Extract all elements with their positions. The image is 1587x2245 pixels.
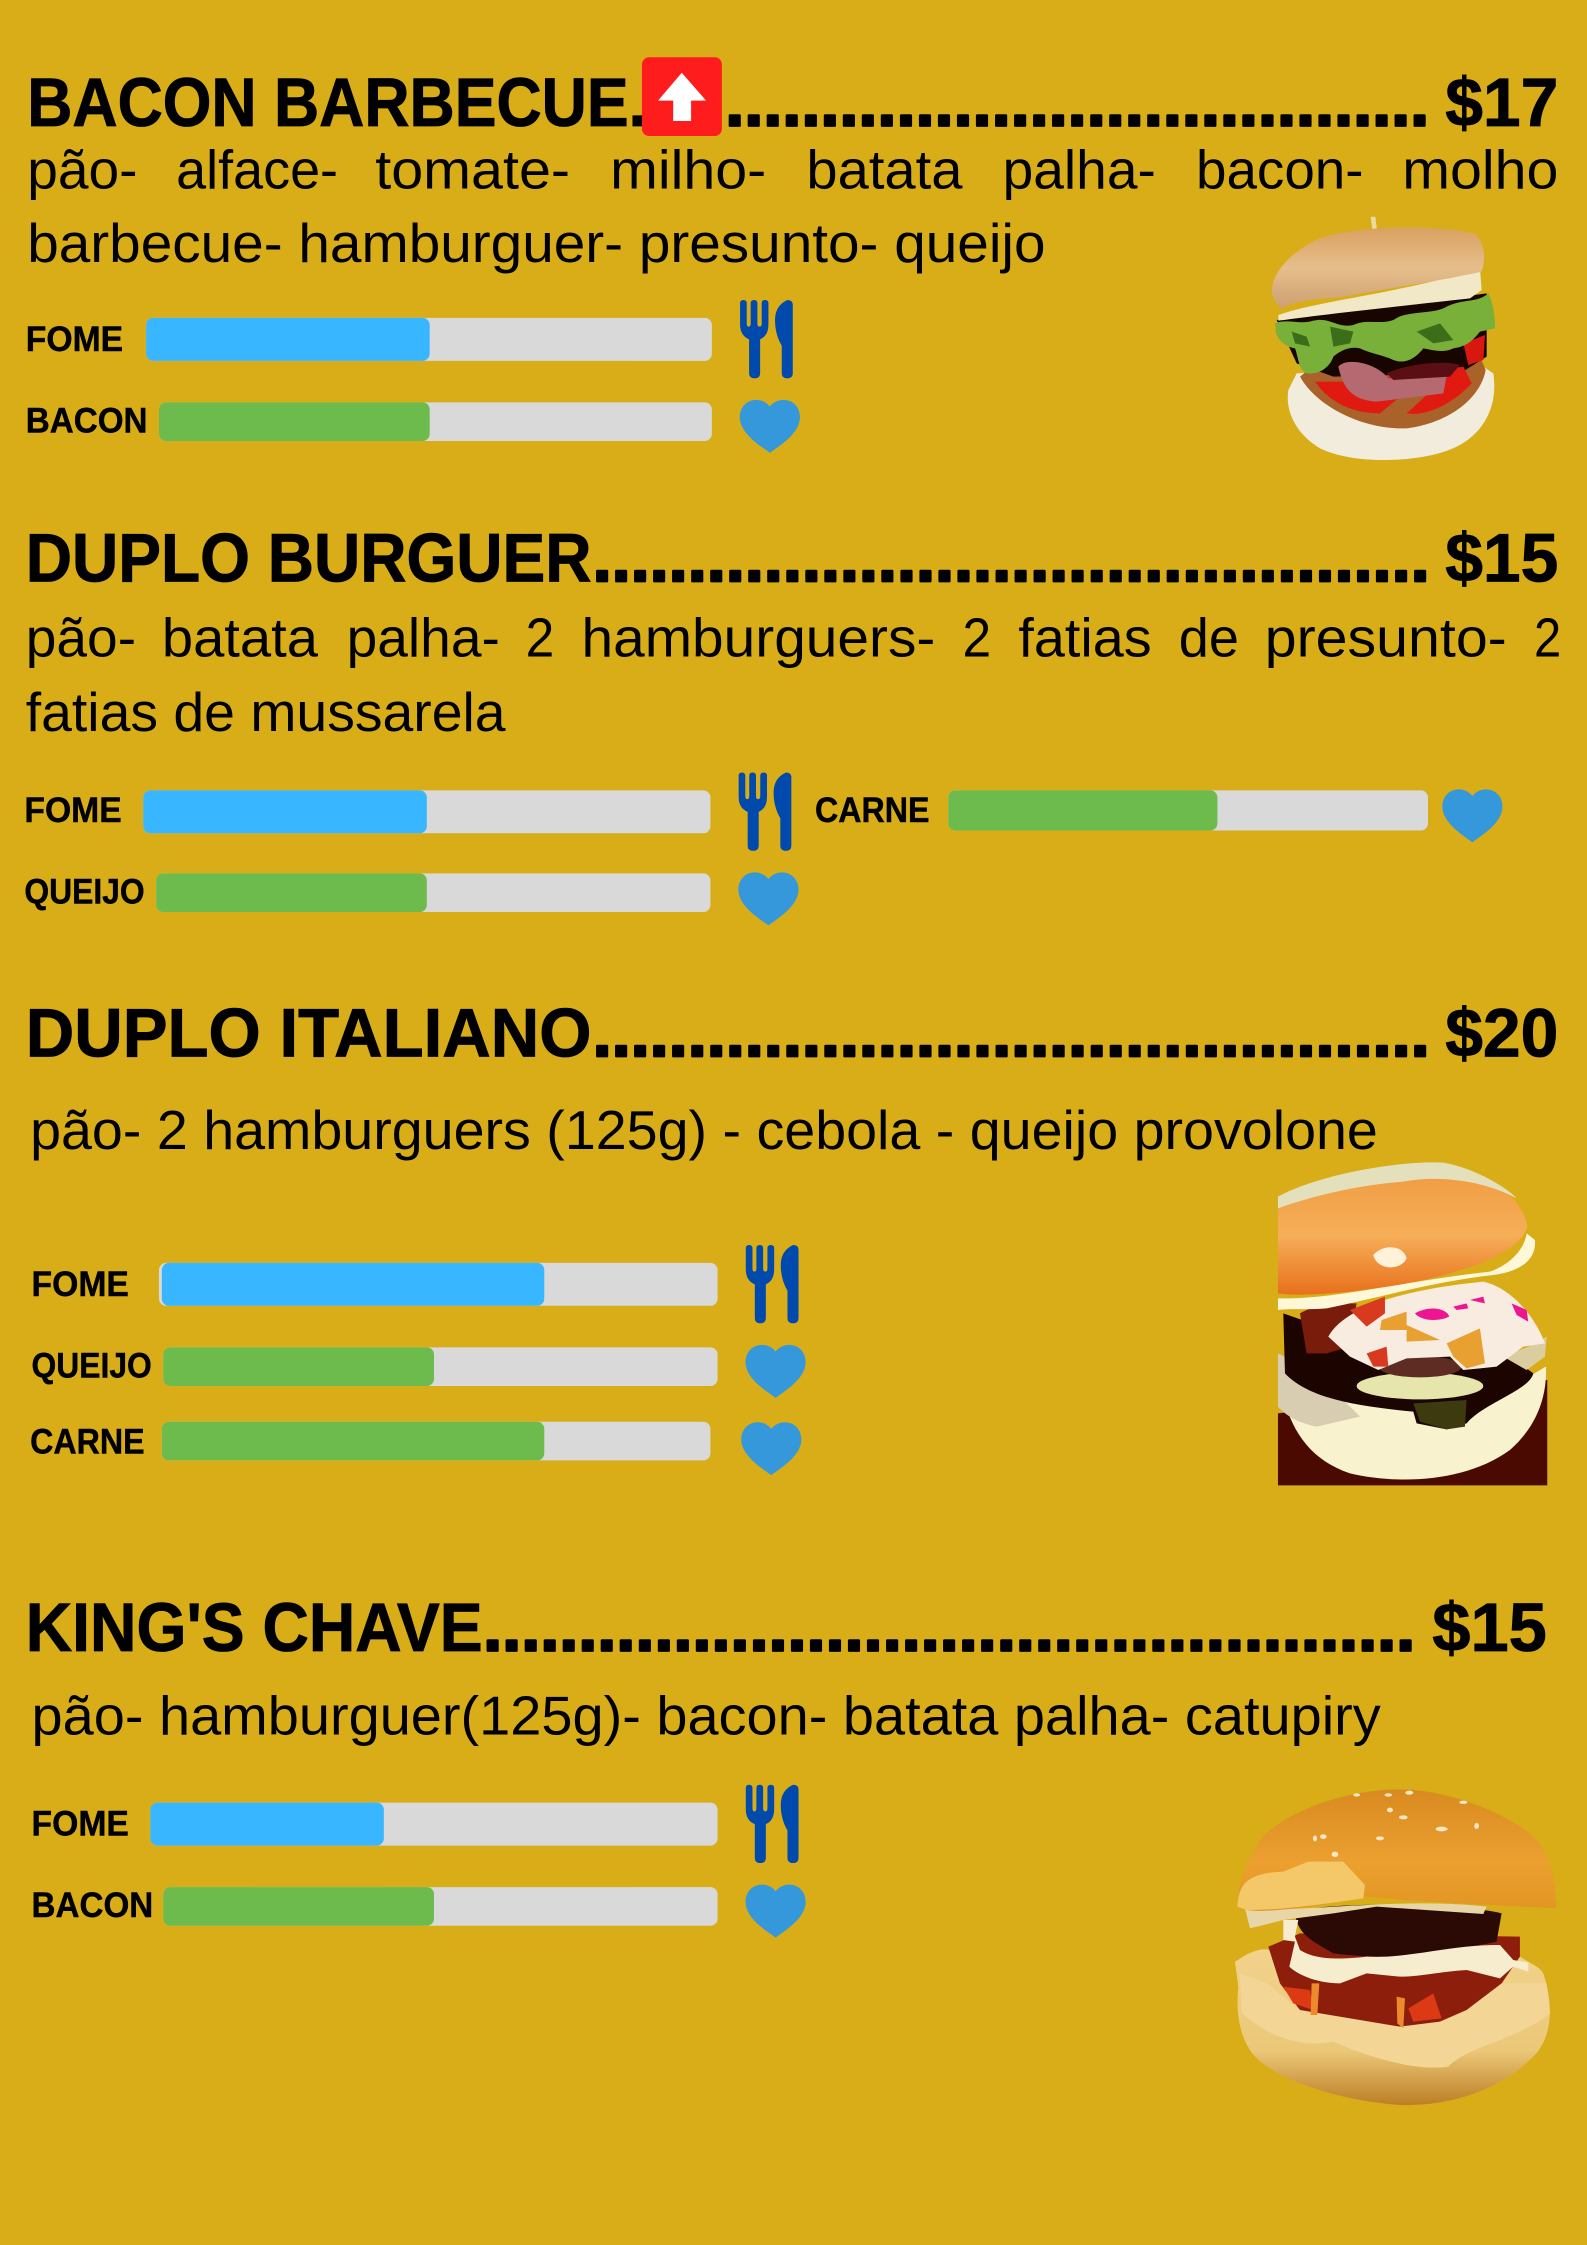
image: sesame burger: [1235, 1789, 1556, 2105]
panel: King's Chave: [26, 1589, 1556, 2105]
ingredients text: pão-: [26, 607, 136, 668]
ingredients text: [26, 607, 1561, 743]
ingredients text: palha-: [347, 607, 500, 668]
image: bacon burger: [1272, 217, 1495, 460]
icon: red up-arrow button: [642, 57, 722, 136]
ingredients text: milho-: [610, 139, 766, 200]
icon: fork and knife: [739, 772, 791, 851]
bar: Carne: CARNE: [815, 791, 930, 830]
ingredients text: pão- 2 hamburguers (125g) - cebola - queijo provolone: [30, 1100, 1378, 1161]
bar: Fome: FOME: [24, 791, 122, 830]
icon: fork and knife: [746, 1785, 799, 1863]
bar: Carne: [815, 790, 1428, 830]
bar: Bacon: [32, 1886, 718, 1926]
ingredients text: batata: [162, 607, 319, 668]
bar: Fome: [26, 318, 712, 361]
ingredients text: 2: [963, 607, 991, 668]
ingredients text: hamburguers-: [582, 607, 935, 668]
leader dots: ............................................: [593, 996, 1429, 1070]
heading: Duplo Italiano: DUPLO ITALIANO: [26, 995, 592, 1072]
leader dots: .................................................: [484, 1590, 1415, 1664]
bar: Queijo: QUEIJO: [24, 872, 145, 911]
bar: Fome: [32, 1803, 718, 1846]
bar: Fome: FOME: [26, 320, 123, 359]
icon: heart: [746, 1885, 806, 1938]
bar: Carne: CARNE: [30, 1422, 145, 1461]
leader dots: ............................................: [593, 521, 1429, 595]
bar: Bacon: BACON: [26, 401, 148, 440]
ingredients text: batata: [806, 139, 963, 200]
bar: Fome: [32, 1263, 718, 1306]
ingredients text: 2: [1534, 607, 1561, 668]
bar: Queijo: QUEIJO: [32, 1346, 152, 1385]
ingredients text: 2: [526, 607, 554, 668]
bar: Queijo: [32, 1346, 718, 1386]
panel: Bacon Barbecue: [26, 57, 1558, 460]
ingredients text: tomate-: [375, 139, 570, 200]
bar: Carne: [30, 1422, 710, 1461]
image: cheese burger: [1278, 1162, 1547, 1485]
icon: heart: [741, 1422, 801, 1475]
price: $20: [1445, 995, 1558, 1072]
bar: Fome: FOME: [32, 1805, 129, 1844]
ingredients text: alface-: [176, 139, 338, 200]
icon: heart: [738, 872, 799, 925]
price: $15: [1445, 519, 1558, 596]
bar: Bacon: BACON: [32, 1886, 153, 1925]
ingredients text: [27, 139, 1558, 274]
icon: heart: [740, 400, 800, 453]
panel: Duplo Burguer: [24, 519, 1561, 925]
bar: Bacon: [26, 401, 712, 441]
ingredients text: fatias de mussarela: [26, 682, 506, 743]
icon: heart: [746, 1345, 806, 1398]
bar: Queijo: [24, 872, 710, 912]
leader dots: .....................................: [726, 66, 1429, 140]
price: $15: [1432, 1589, 1547, 1666]
icon: heart: [1442, 789, 1502, 842]
heading: Duplo Burguer: DUPLO BURGUER: [26, 519, 592, 596]
heading: King's Chave: KING'S CHAVE: [26, 1589, 483, 1666]
bar: Fome: [24, 790, 710, 833]
ingredients text: bacon-: [1196, 139, 1364, 200]
icon: fork and knife: [740, 300, 793, 378]
ingredients text: de: [1179, 607, 1239, 668]
icon: fork and knife: [746, 1245, 799, 1323]
ingredients text: palha-: [1003, 139, 1156, 200]
ingredients text: presunto-: [1265, 607, 1507, 668]
price: $17: [1445, 64, 1558, 141]
ingredients text: molho: [1402, 139, 1558, 200]
ingredients text: pão- hamburguer(125g)- bacon- batata palha- catupiry: [32, 1686, 1382, 1747]
panel: Duplo Italiano: [26, 995, 1558, 1485]
ingredients text: pão-: [27, 139, 138, 200]
bar: Fome: FOME: [32, 1265, 129, 1304]
heading: Bacon Barbecue: BACON BARBECUE.: [27, 64, 646, 141]
ingredients text: fatias: [1018, 607, 1152, 668]
ingredients text: barbecue- hamburguer- presunto- queijo: [27, 213, 1046, 274]
